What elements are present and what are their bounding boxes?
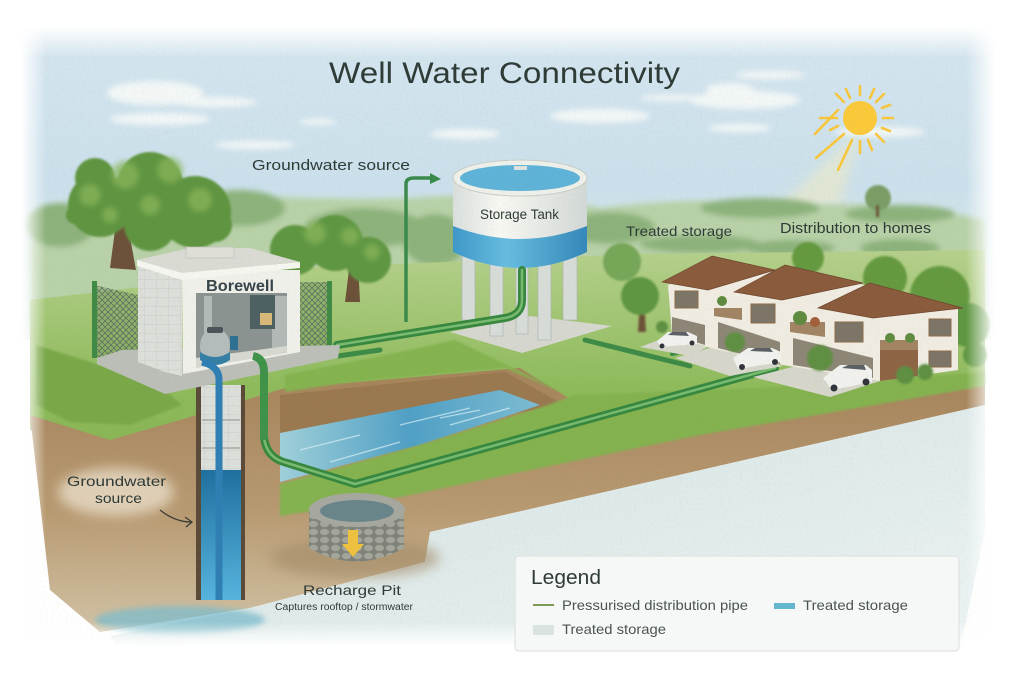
label: treated storage: Treated storage (626, 223, 732, 239)
legend panel (515, 556, 959, 651)
tree behind borewell (270, 215, 391, 302)
houses (640, 256, 963, 397)
driveways (640, 335, 880, 397)
big tree left (66, 152, 232, 270)
legend item: pressurised pipe: Pressurised distribution pipe (562, 597, 748, 613)
cars (657, 332, 872, 392)
main green pipe to houses (264, 340, 775, 484)
sun (770, 86, 893, 215)
recharge pit (270, 493, 440, 578)
lake foreground (110, 405, 985, 662)
reflecting pool (280, 390, 540, 482)
label: distribution to homes: Distribution to homes (780, 221, 931, 237)
legend item: treated storage grey: Treated storage (562, 621, 666, 637)
label: groundwater source left: Groundwater (67, 473, 166, 489)
shrubs (656, 321, 933, 384)
background trees around houses (603, 185, 990, 367)
fence left and right (92, 281, 332, 380)
soil cross-section (30, 368, 985, 632)
meadow (30, 250, 985, 520)
green outlet pipe (253, 356, 264, 440)
riser arrow: groundwater source (406, 173, 441, 322)
balconies (714, 296, 918, 350)
background sky (0, 0, 1024, 340)
house windows (675, 291, 951, 367)
label: groundwater source left: source (95, 490, 142, 506)
tank legs (462, 255, 577, 340)
distant hills and tree line (25, 190, 985, 330)
label: storage tank: Storage Tank (480, 207, 559, 222)
borewell building (137, 247, 300, 376)
clouds (107, 71, 925, 149)
pump house platform (97, 345, 340, 394)
title: Well Water Connectivity (329, 57, 680, 90)
borewell column (196, 385, 245, 600)
label: recharge pit: Captures rooftop / stormwater (275, 602, 414, 613)
label: groundwater source top: Groundwater source (252, 157, 410, 174)
storage tank (450, 160, 612, 353)
garages (672, 317, 873, 378)
grass areas (36, 340, 985, 516)
leader arrow (160, 510, 192, 527)
down arrow (342, 530, 364, 557)
house roofs (662, 256, 963, 318)
legend heading: Legend (531, 567, 601, 589)
legend item: treated storage blue: Treated storage (803, 597, 908, 613)
house walls (668, 262, 958, 381)
label: borewell: Borewell (206, 278, 274, 295)
tank feed pipe (337, 270, 522, 356)
soft halo behind left label (58, 468, 174, 516)
label: groundwater source left (67, 473, 166, 506)
pump tank (200, 327, 238, 365)
label: recharge pit: Recharge Pit (303, 582, 401, 598)
blue riser pipe (202, 362, 219, 600)
label: recharge pit (275, 582, 414, 613)
